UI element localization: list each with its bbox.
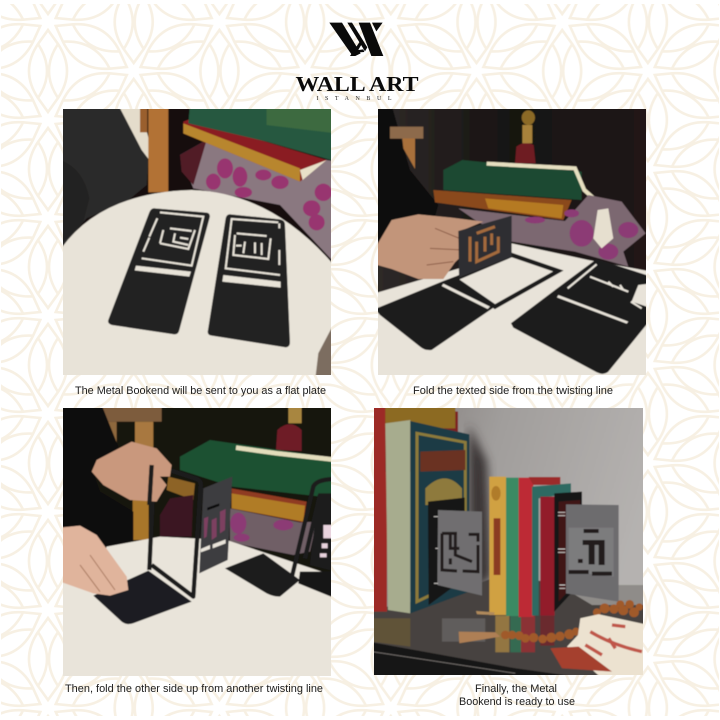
- icon: WA monogram: [329, 23, 383, 56]
- fabric: [230, 508, 317, 555]
- left bookend upright: [428, 498, 465, 605]
- prayer beads: [501, 600, 643, 643]
- base plate: [93, 571, 192, 624]
- left bookend text panel: [437, 510, 482, 596]
- caption: step 2: Fold the texted side from the twisting line: [413, 385, 613, 397]
- chair wood: [102, 408, 162, 422]
- caption: step 4: Bookend is ready to use: [459, 696, 575, 708]
- caption: step 1: The Metal Bookend will be sent to you as a flat plate: [75, 385, 326, 397]
- panel: step 4 photo: [372, 405, 649, 682]
- sweater: [60, 405, 133, 547]
- green book: [443, 160, 582, 200]
- gold background through frame: [167, 477, 195, 500]
- fabric: [458, 195, 646, 267]
- table: [60, 537, 337, 682]
- bookend plate one: [108, 208, 210, 334]
- wordmark: WALL ART: [296, 72, 419, 96]
- panel: step 2 photo: [375, 105, 652, 382]
- panel: step 1 photo: [60, 105, 337, 382]
- perfume bottle: [276, 424, 302, 451]
- table edge: [372, 642, 612, 682]
- right bookend upright: [554, 492, 582, 612]
- logo: [296, 23, 419, 102]
- hand: [375, 214, 483, 279]
- frame: [149, 465, 201, 597]
- pearls: [236, 448, 337, 460]
- second flat plate: [511, 259, 652, 374]
- caption: step 4: Finally, the Metal: [475, 683, 557, 695]
- green book: [188, 109, 331, 160]
- green book: [180, 440, 337, 498]
- grey text panel: [199, 477, 232, 573]
- lifted text panel: [458, 216, 512, 278]
- right bookend text panel: [566, 504, 619, 602]
- tabletop: [372, 578, 649, 682]
- second bookend: [225, 553, 300, 597]
- panel: step 3 photo: [60, 405, 337, 682]
- perfume bottle: [515, 143, 536, 163]
- tall red books: [372, 405, 387, 612]
- sweater: [378, 109, 438, 242]
- red gilded book: [433, 190, 572, 220]
- sweater: [60, 105, 148, 248]
- chair wood: [390, 127, 423, 139]
- chair wood: [148, 105, 168, 192]
- sub wordmark: ISTANBUL: [316, 96, 392, 102]
- wall shadow: [469, 425, 492, 592]
- caption: step 4: [459, 683, 575, 708]
- table: [375, 243, 652, 382]
- fabric: [180, 140, 337, 265]
- tassel: [593, 208, 613, 248]
- blue ornate book: [385, 420, 410, 613]
- red gilded book: [183, 119, 327, 182]
- lower hand: [60, 526, 128, 596]
- bookend plate two: [208, 214, 290, 347]
- reflections: [372, 616, 554, 652]
- middle books: [489, 477, 506, 615]
- folded patterned cloth: [567, 614, 649, 682]
- red gilded book: [232, 488, 307, 522]
- flat plate with lifted frame: [375, 277, 495, 350]
- upper hand: [92, 442, 172, 502]
- table: [60, 190, 337, 382]
- pearls: [486, 160, 595, 197]
- caption: step 3: Then, fold the other side up from another twisting line: [65, 683, 323, 695]
